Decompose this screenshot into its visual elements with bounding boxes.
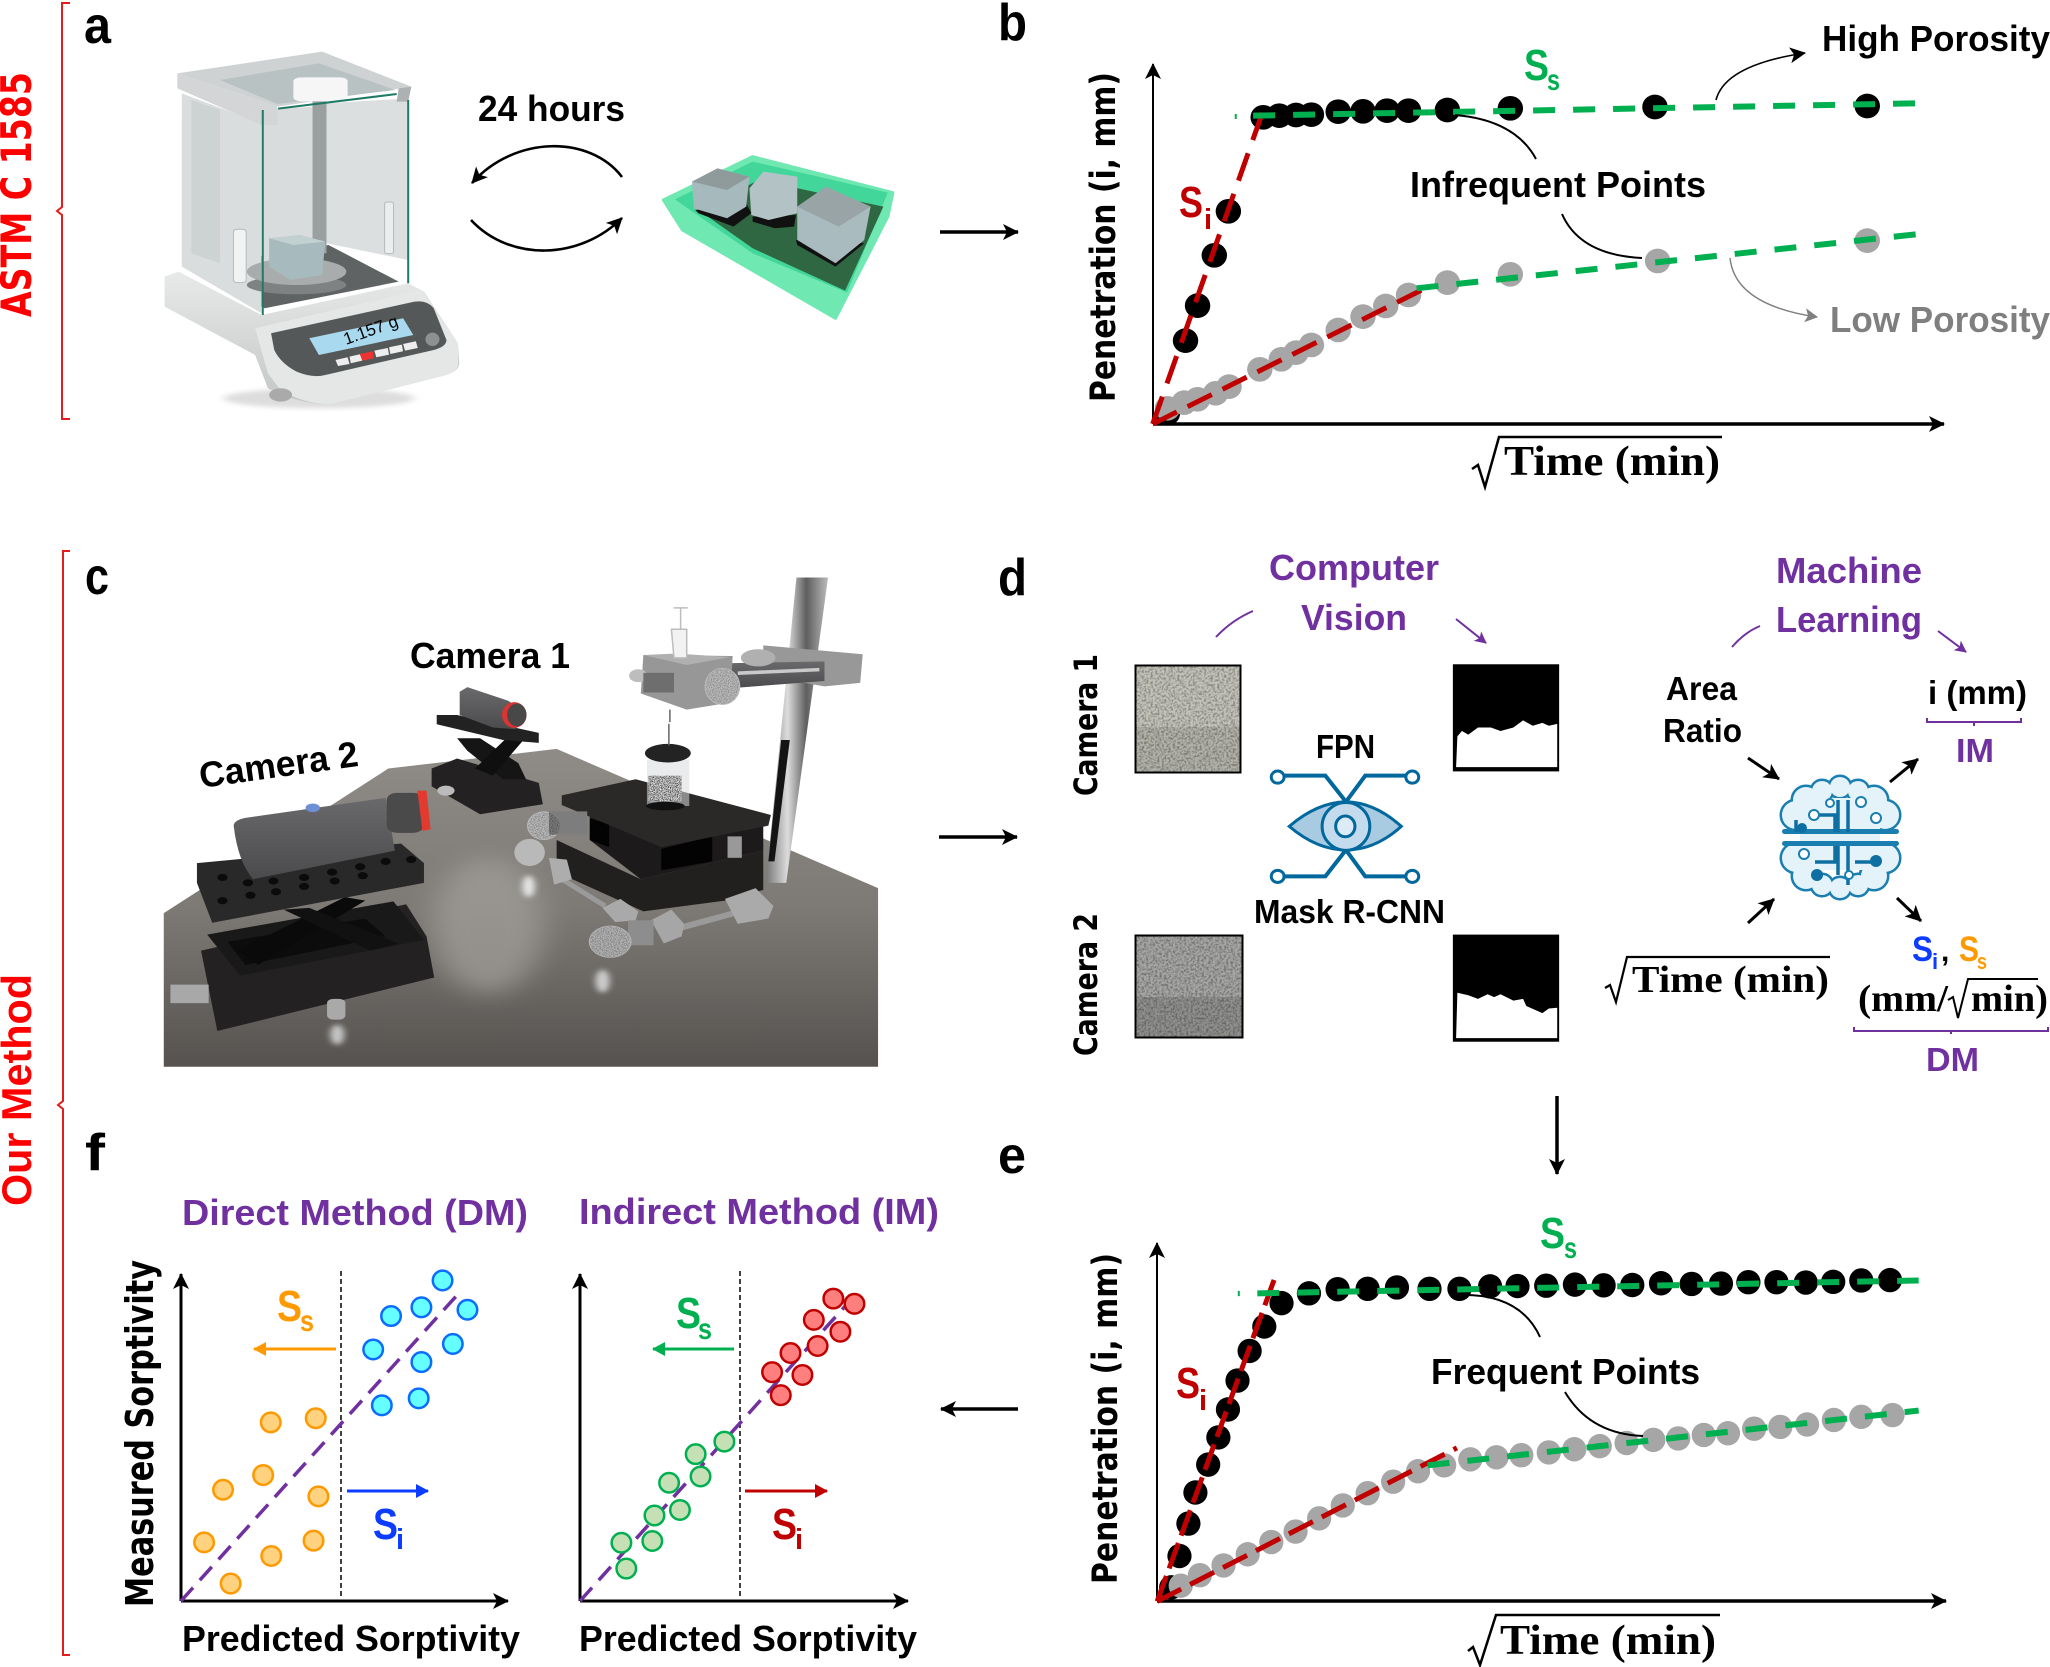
arrow: balance to tray cycle, upper [472, 146, 622, 183]
panel f: direct and indirect scatter plots [118, 1191, 939, 1659]
x axis title: Time (min) [1500, 1618, 1716, 1664]
panel b: chart [1084, 18, 2050, 487]
arrow: d to e [1555, 1096, 1559, 1174]
label Camera 2: Camera 2 [196, 733, 361, 796]
leader curves [1458, 1295, 1643, 1436]
bracket IM [1927, 718, 2021, 726]
bracket: Our Method [58, 551, 70, 1655]
label Camera 1 rotated: Camera 1 [1067, 654, 1105, 796]
y axis [1152, 64, 1154, 424]
arrows around brain [1748, 758, 1921, 923]
secondary sorptivity fit lines [1239, 1280, 1919, 1465]
table surface [164, 749, 878, 1067]
label Ss: S [1524, 41, 1549, 90]
y axis title: Penetration (i, mm) [1086, 1253, 1126, 1584]
label Area Ratio: Area [1666, 670, 1738, 707]
heading Machine Learning [1776, 550, 1922, 640]
label Si, Ss: S [1912, 930, 1933, 969]
label Si blue: i [396, 1524, 404, 1556]
label Si: S [1176, 1359, 1200, 1408]
y axis title: Measured Sorptivity [118, 1260, 162, 1607]
label units mm per sqrt min: (mm/ [1858, 978, 1948, 1020]
label Camera 2 rotated: Camera 2 [1067, 913, 1105, 1056]
image: camera 1 mask [1453, 664, 1559, 771]
arrow: c to d [939, 835, 1017, 839]
initial sorptivity fit lines [1153, 107, 1425, 424]
panel letter f: f [85, 1124, 106, 1182]
panel e: chart [1086, 1209, 1946, 1665]
arrow to High Porosity [1716, 53, 1805, 100]
label Si: S [1179, 178, 1203, 227]
label Ss: s [1564, 1232, 1577, 1265]
label Si, Ss: , [1941, 935, 1949, 968]
points: blue high sorptivity [363, 1271, 477, 1415]
x axis title: Time (min) [1504, 439, 1720, 485]
panel c: photo of two-camera rig [164, 577, 878, 1067]
y axis [1156, 1243, 1158, 1601]
x axis title left: Predicted Sorptivity [182, 1618, 520, 1659]
label Ss: s [1547, 64, 1560, 97]
heading Machine Learning: Machine [1776, 550, 1922, 591]
panel letter e: e [998, 1127, 1026, 1185]
label Area Ratio [1663, 670, 1742, 749]
display reading: 1.157 g [341, 312, 401, 349]
image: camera 2 mask [1453, 935, 1559, 1042]
image: tray with concrete cubes [663, 157, 893, 318]
label Frequent Points: Frequent Points [1431, 1351, 1700, 1392]
specimen jar [647, 760, 689, 806]
support pole and clamp [766, 577, 828, 883]
label sqrt Time: Time (min) [1632, 959, 1829, 1001]
label IM: IM [1956, 732, 1994, 769]
gray data points [1169, 1403, 1905, 1598]
label Si: i [1199, 1385, 1207, 1417]
label Si, Ss: i [1932, 949, 1938, 974]
arrow: a to b [940, 230, 1018, 234]
label: 24 hours: 24 hours [478, 88, 625, 129]
label Ss orange: s [300, 1305, 314, 1338]
image: camera 2 raw [1136, 936, 1242, 1038]
initial sorptivity fit lines [1157, 1273, 1457, 1601]
heading Indirect Method: Indirect Method (IM) [579, 1191, 939, 1232]
arrow: e to f [941, 1407, 1018, 1411]
right translation stage [557, 840, 763, 911]
black data points [1159, 1268, 1902, 1600]
syringe [671, 608, 688, 658]
label i (mm): i (mm) [1928, 674, 2027, 711]
bracket DM [1854, 1027, 2048, 1034]
secondary sorptivity fit lines [1236, 103, 1916, 288]
heading Computer Vision [1269, 547, 1439, 638]
icon: eye with circuit nodes [1271, 771, 1419, 882]
icon: brain with circuits [1782, 777, 1899, 898]
panel d: computer vision and machine learning [1067, 547, 2048, 1078]
heading Direct Method: Direct Method (DM) [182, 1192, 528, 1233]
black data points high porosity [1155, 94, 1880, 426]
points: red [762, 1289, 864, 1405]
label Ss orange [277, 1282, 314, 1338]
label Si: i [1204, 204, 1212, 236]
label Si, Ss: s [1977, 949, 1987, 974]
label Area Ratio: Ratio [1663, 712, 1742, 749]
heading Machine Learning: Learning [1776, 599, 1922, 640]
label Si, Ss: S [1959, 930, 1979, 969]
leader curves to points [1455, 115, 1642, 258]
panel letter d: d [998, 549, 1027, 607]
label Ss green: S [676, 1289, 701, 1338]
label Ss green: s [698, 1313, 712, 1346]
label Ss [1540, 1209, 1577, 1265]
label DM: DM [1926, 1041, 1979, 1078]
panel letter c: c [85, 548, 109, 606]
heading Computer Vision: Computer [1269, 547, 1439, 588]
scatter axes [181, 1274, 908, 1601]
label FPN: FPN [1316, 728, 1375, 765]
x axis [1157, 1599, 1946, 1603]
x axis [1153, 422, 1944, 426]
threshold lines [341, 1271, 740, 1599]
arrow: tray to balance cycle, lower [471, 218, 622, 251]
y axis title: Penetration (i, mm) [1084, 72, 1124, 402]
purple flow strokes [1216, 611, 1966, 652]
label Mask R-CNN: Mask R-CNN [1254, 893, 1445, 930]
label Infrequent Points: Infrequent Points [1410, 164, 1706, 205]
icon: analytical balance [165, 52, 459, 408]
label High Porosity: High Porosity [1822, 18, 2050, 59]
identity lines [181, 1293, 857, 1601]
label Ss orange: S [277, 1282, 302, 1331]
arrows left and right of threshold [254, 1349, 827, 1491]
front camera stage [201, 904, 434, 1031]
label Si red: S [772, 1500, 797, 1549]
points: orange [194, 1408, 328, 1593]
points: green [612, 1432, 734, 1578]
heading Computer Vision: Vision [1301, 597, 1407, 638]
arrow to Low Porosity [1730, 258, 1817, 317]
label Ss: S [1540, 1209, 1565, 1258]
label Si red: i [795, 1524, 803, 1556]
image: camera 1 raw [1136, 666, 1240, 772]
bracket: ASTM C 1585 [57, 3, 70, 419]
gray data points low porosity [1155, 228, 1880, 421]
label Low Porosity: Low Porosity [1830, 299, 2050, 340]
label units mm per sqrt min [1858, 978, 2048, 1020]
label Camera 1: Camera 1 [410, 635, 570, 676]
x axis title right: Predicted Sorptivity [579, 1618, 917, 1659]
label Si blue: S [373, 1500, 398, 1549]
rear camera stage [432, 759, 543, 814]
label units mm per sqrt min: min) [1971, 978, 2048, 1020]
label Si, Ss [1912, 930, 1987, 974]
